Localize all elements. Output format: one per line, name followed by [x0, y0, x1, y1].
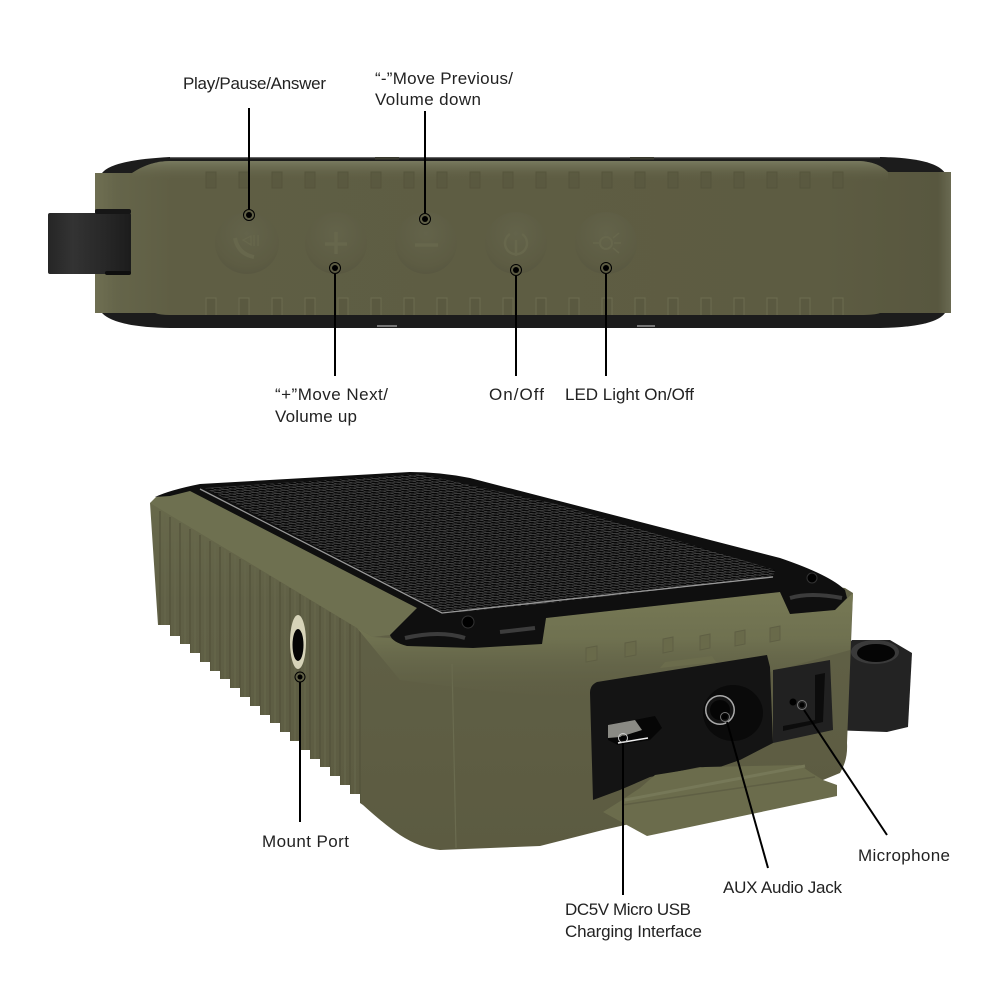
- black shell edges: [102, 157, 945, 328]
- callout: play pause answer: Play/Pause/Answer: [183, 74, 326, 93]
- callout: microphone: Microphone: [858, 846, 950, 865]
- green body: [95, 161, 951, 315]
- button: minus: [395, 212, 457, 274]
- micro USB port: [608, 716, 662, 745]
- button: plus: [305, 212, 367, 274]
- button: power: [485, 212, 547, 274]
- AUX jack: [703, 685, 763, 741]
- callout: move previous: “-”Move Previous/: [375, 69, 513, 88]
- hook strap: [48, 209, 131, 275]
- speaker mesh: [205, 474, 775, 612]
- mount port: [290, 615, 306, 669]
- callout: move previous: [375, 69, 513, 224]
- lip under frame: [357, 592, 853, 700]
- port panel: [590, 655, 773, 800]
- top green strip: [150, 490, 417, 637]
- callout: micro USB: Charging Interface: [565, 922, 702, 941]
- callout: LED light: LED Light On/Off: [565, 385, 694, 404]
- callout: on off: [489, 264, 544, 404]
- callout: move next: Volume up: [275, 407, 357, 426]
- ribs top row: [206, 172, 843, 188]
- corner screws: [405, 573, 842, 638]
- button: LED light: [575, 212, 637, 274]
- callout: move next: [275, 262, 388, 426]
- panel top tab: [660, 656, 716, 668]
- bottom speaker view: [150, 472, 912, 850]
- callout: micro USB: DC5V Micro USB: [565, 900, 691, 919]
- callout: on off: On/Off: [489, 385, 544, 404]
- callout: micro USB: [565, 734, 702, 941]
- hook plate: [773, 660, 833, 743]
- black top frame: [155, 472, 847, 648]
- callout: mount port: [262, 672, 349, 851]
- top speaker view: [48, 157, 951, 328]
- body front: [150, 498, 853, 850]
- callout: move next: “+”Move Next/: [275, 385, 388, 404]
- callout: move previous: Volume down: [375, 90, 481, 109]
- callout: play pause answer: [183, 74, 326, 220]
- hook strap loop: [830, 640, 912, 732]
- mesh rim highlight: [200, 489, 773, 613]
- callout: mount port: Mount Port: [262, 832, 349, 851]
- rib lines: [160, 511, 360, 803]
- button: play pause answer: [215, 212, 279, 274]
- callout: AUX jack: AUX Audio Jack: [723, 878, 842, 897]
- ribs bottom row: [206, 298, 843, 315]
- callout: microphone: [798, 700, 950, 865]
- port flap: [603, 765, 837, 836]
- callout: AUX jack: [720, 712, 842, 897]
- callout: LED light: [565, 262, 694, 404]
- lip ribs: [586, 626, 780, 662]
- edge panel seam: [452, 664, 456, 848]
